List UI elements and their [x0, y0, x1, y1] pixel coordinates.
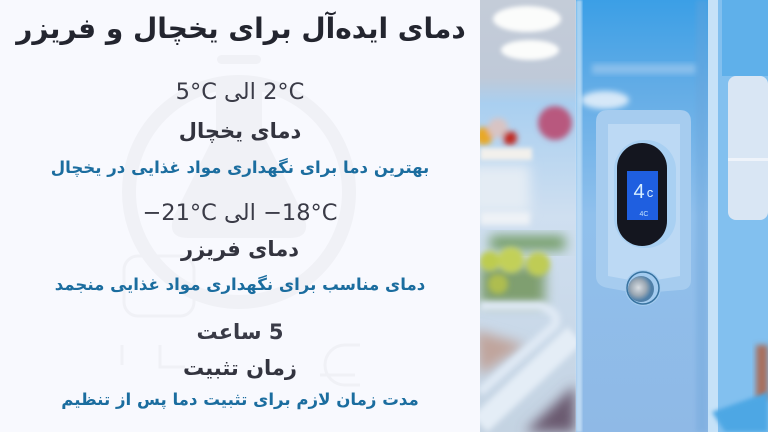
watermark: faint logo: [0, 0, 480, 432]
right door shelf: [708, 0, 768, 432]
thermometer housing: [596, 110, 691, 292]
stat: fridge temperature: [51, 79, 429, 178]
freezer temperature description: دمای مناسب برای نگهداری مواد غذایی منجمد: [55, 275, 425, 294]
photo: fridge door with digital thermometer: [480, 0, 768, 432]
stabilisation time label: زمان تثبیت: [183, 356, 297, 380]
digital display: 4C: [640, 211, 648, 218]
fridge temperature label: دمای یخچال: [179, 119, 301, 143]
stabilisation time value: 5 ساعت: [196, 320, 284, 344]
stabilisation time description: مدت زمان لازم برای تثبیت دما پس از تنظیم: [61, 390, 419, 409]
fridge temperature value: 2°C الی 5°C: [176, 79, 304, 105]
digital display: c: [647, 185, 654, 200]
metal button: [625, 270, 661, 306]
fridge temperature description: بهترین دما برای نگهداری مواد غذایی در یخچال: [51, 158, 429, 177]
digital display: 4: [633, 181, 645, 203]
freezer temperature label: دمای فریزر: [181, 237, 299, 261]
title: دمای ایده‌آل برای یخچال و فریزر: [16, 12, 466, 45]
stat: freezer temperature: [55, 200, 425, 294]
stat: stabilisation time: [61, 320, 419, 410]
fridge interior: [470, 0, 580, 432]
door panel: [576, 0, 712, 432]
freezer temperature value: −18°C الی −21°C: [142, 200, 338, 226]
digital display: [617, 143, 667, 246]
